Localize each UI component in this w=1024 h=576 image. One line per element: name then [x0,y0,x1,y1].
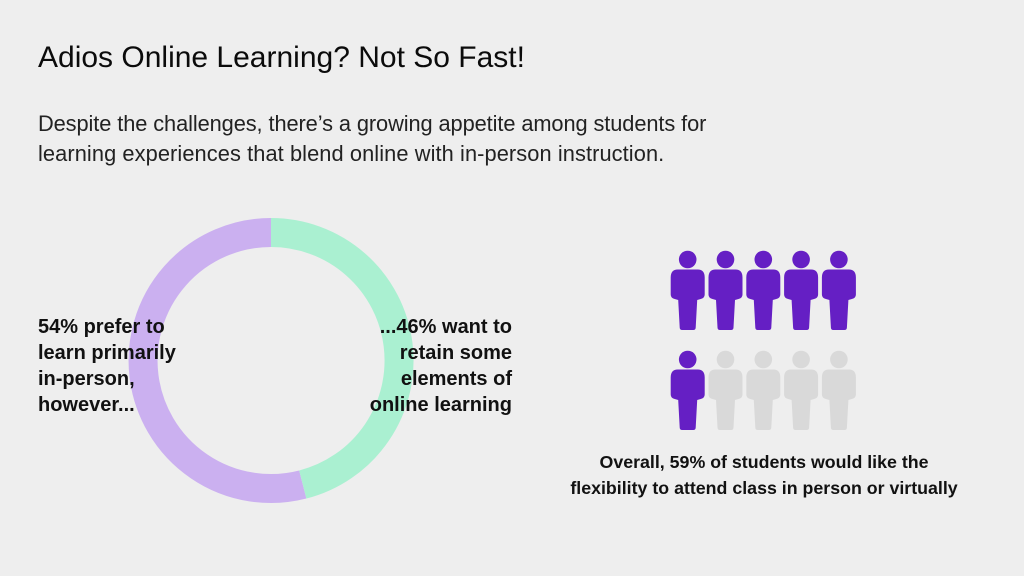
intro text: Despite the challenges, there’s a growing appetite among students for [38,111,706,136]
label: 54% in-person: however... [38,394,135,416]
row 1 of people [671,251,856,330]
caption: Overall, 59% of students would like the [599,452,929,472]
row 2: highlighted person [671,351,705,430]
label: 54% in-person: learn primarily [38,342,176,364]
segment: 46% online [271,232,399,484]
label: 46% online [370,316,512,416]
label: 54% in-person: in-person, [38,368,135,390]
label: 46% online: ...46% want to [380,316,512,338]
caption: flexibility to attend class in person or virtually [570,478,958,498]
label: 46% online: elements of [401,368,512,390]
caption [570,452,958,498]
label: 46% online: online learning [370,394,512,416]
segment: 54% in-person [143,232,303,488]
row 2: grey people [708,351,856,430]
label: 54% in-person [38,316,176,416]
intro text: learning experiences that blend online with in-person instruction. [38,140,664,166]
title: Adios Online Learning? Not So Fast! [38,41,525,74]
intro text [38,111,706,166]
label: 54% in-person: 54% prefer to [38,316,165,338]
label: 46% online: retain some [400,342,512,364]
